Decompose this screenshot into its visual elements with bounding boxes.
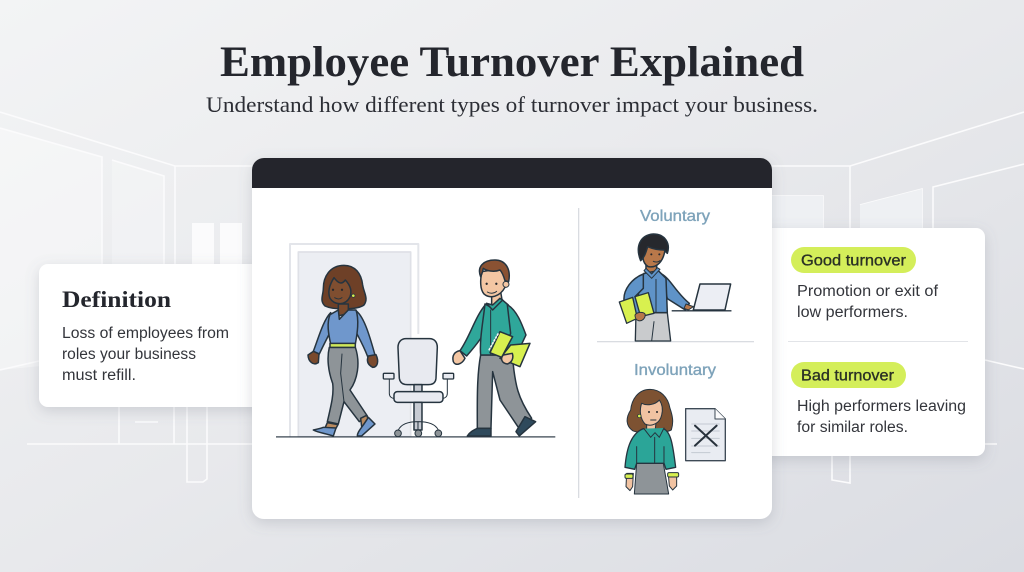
man with folder [453,260,536,436]
floor line [276,436,555,437]
subtitle: Understand how different types of turnover impact your business. [206,92,818,117]
definition text [62,325,229,384]
man with dark hair [619,234,693,341]
woman walking [308,265,378,436]
woman with curly hair [625,389,679,494]
window top bar [252,158,772,188]
bad turnover text [797,398,966,436]
panel: good and bad turnover [755,228,985,456]
badge: bad turnover [791,362,906,388]
good turnover text [797,283,939,321]
definition text: roles your business [62,346,196,363]
panel: main window [252,158,772,519]
laptop [672,284,731,311]
illustration: office departure scene [276,244,555,437]
definition text: must refill. [62,367,136,384]
badge: good turnover [791,247,916,273]
definition heading: Definition [62,287,171,312]
document with cross [686,409,725,461]
illustration: voluntary employee at laptop [619,234,731,341]
illustration: involuntary employee with rejected document [625,389,725,494]
panel: definition [39,264,265,407]
office background line art [0,112,1024,483]
label: voluntary: Voluntary [640,208,710,225]
good turnover text: Promotion or exit of [797,283,939,300]
door [290,244,422,437]
badge: good turnover: Good turnover [801,252,906,270]
bad turnover text: High performers leaving [797,398,966,415]
badge: bad turnover: Bad turnover [801,368,894,384]
office chair [383,339,454,437]
good turnover text: low performers. [797,304,908,321]
label: involuntary: Involuntary [634,362,716,379]
bad turnover text: for similar roles. [797,419,908,436]
title: Employee Turnover Explained [220,39,804,86]
definition text: Loss of employees from [62,325,229,342]
